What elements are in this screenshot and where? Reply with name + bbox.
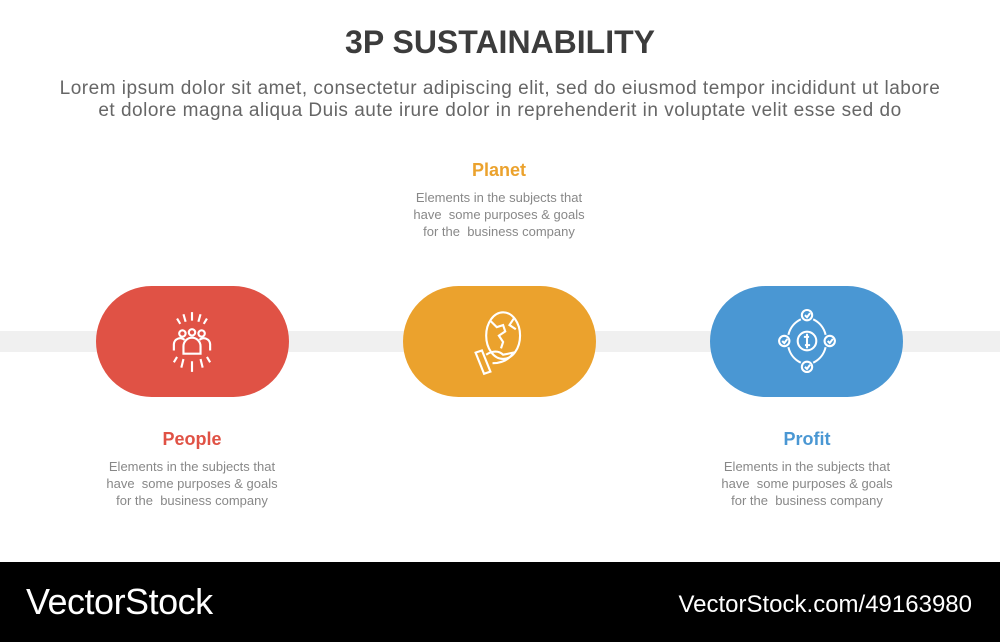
text: people: have some purposes & goals [106,476,278,491]
text: people [106,459,278,508]
subtitle [60,78,940,121]
text: planet: for the business company [423,224,575,239]
panel: people [96,286,289,397]
text: profit: have some purposes & goals [721,476,893,491]
panel: profit [710,286,903,397]
text: profit: for the business company [731,493,883,508]
text: planet: have some purposes & goals [413,207,585,222]
footer url: VectorStock.com/49163980 [678,591,972,618]
footer bar [0,562,1000,642]
subtitle: Lorem ipsum dolor sit amet, consectetur adipiscing elit, sed do eiusmod tempor incididunt ut labore [60,78,940,99]
text: planet [413,190,585,239]
text: people: Elements in the subjects that [109,459,275,474]
panel: planet [403,286,596,397]
subtitle: et dolore magna aliqua Duis aute irure dolor in reprehenderit in voluptate velit esse sed do [98,100,902,121]
text: planet: Elements in the subjects that [416,190,582,205]
footer logo: VectorStock [26,581,213,622]
text: profit [721,459,893,508]
text: people: for the business company [116,493,268,508]
text: profit: Elements in the subjects that [724,459,890,474]
heading: people: People [162,429,222,449]
icon: people [172,312,212,372]
heading: profit: Profit [784,429,830,449]
timeline band [0,331,1000,352]
icon: globe in hand [474,311,522,376]
title: 3P SUSTAINABILITY [345,24,655,60]
icon: dollar network [778,309,836,373]
heading: planet: Planet [472,160,526,180]
